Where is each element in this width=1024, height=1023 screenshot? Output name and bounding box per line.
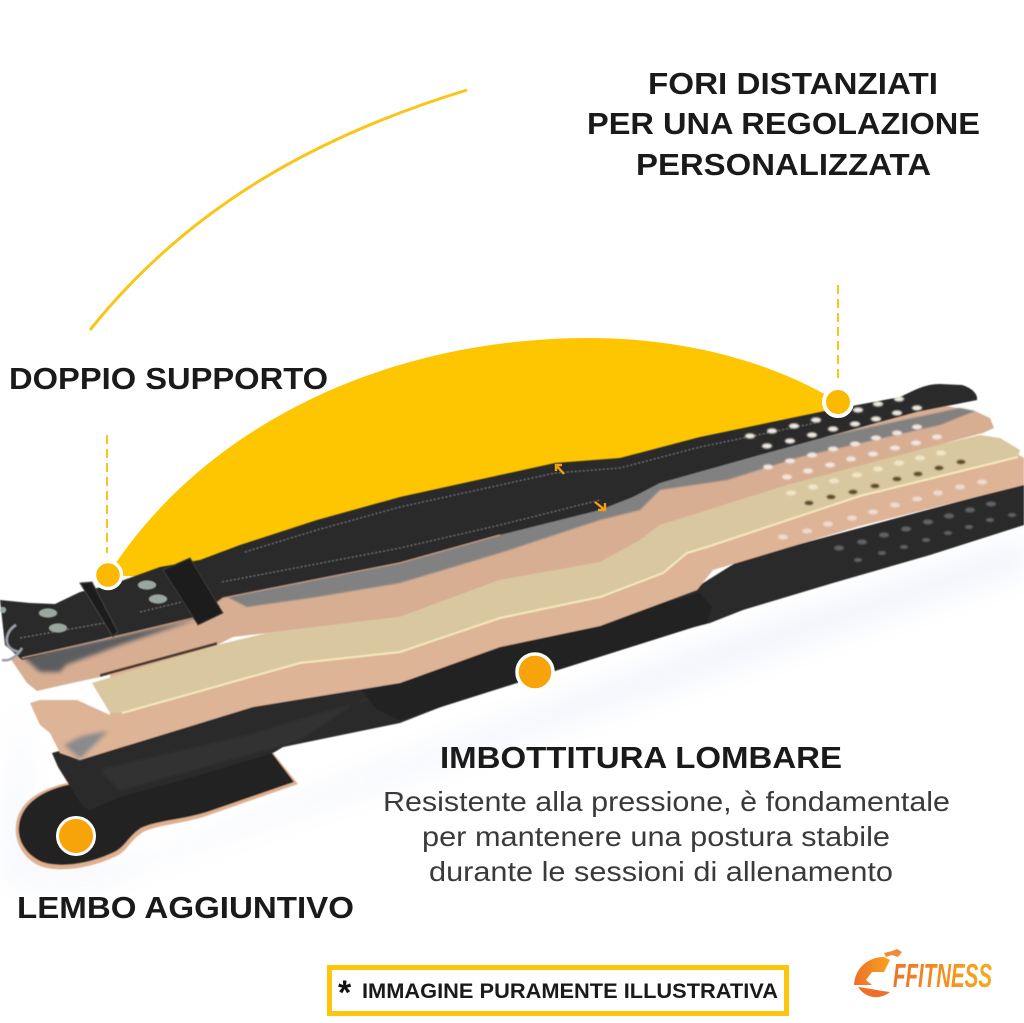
body text: per mantenere una postura stabile [422, 821, 890, 852]
holes on top layer [745, 396, 922, 448]
marker: lembo [58, 818, 94, 854]
grey shadow on strap end [22, 618, 200, 672]
holes on beige layer [786, 450, 946, 496]
logo [854, 949, 992, 997]
rivets [0, 580, 167, 632]
small arrows [556, 465, 605, 510]
belt loops [80, 582, 118, 637]
heading: fori distanziati: PER UNA REGOLAZIONE [587, 106, 980, 141]
lumbar pad [360, 593, 712, 720]
dark flap edge [100, 642, 217, 677]
marker: imbottitura [517, 654, 553, 690]
belt illustration [0, 384, 1024, 880]
heading: fori distanziati [587, 66, 980, 182]
heading: fori distanziati: FORI DISTANZIATI [648, 66, 938, 101]
body text: Resistente alla pressione, è fondamentale [383, 786, 950, 817]
body text: durante le sessioni di allenamento [429, 856, 893, 887]
holes on upper tan layer [763, 424, 942, 480]
tan edge line [22, 535, 500, 658]
holes on black layer [834, 502, 1016, 562]
holes on lower tan layer [778, 480, 987, 540]
heading: lembo aggiuntivo: LEMBO AGGIUNTIVO [17, 890, 354, 925]
body text [383, 786, 950, 887]
yellow semicircle background [108, 338, 838, 580]
grey shadow on tan layer [223, 408, 975, 607]
disclaimer box [330, 968, 786, 1014]
top black layer [0, 384, 977, 660]
soft shadow [10, 540, 1024, 880]
dashed leader lines [107, 285, 838, 553]
marker: doppio supporto [94, 562, 122, 588]
disclaimer box: IMMAGINE PURAMENTE ILLUSTRATIVA [362, 980, 778, 1003]
black padded layer [52, 484, 1024, 810]
upper tan layer [10, 405, 994, 691]
marker: fori [824, 388, 852, 416]
heading: fori distanziati: PERSONALIZZATA [636, 147, 931, 182]
buckle [2, 625, 22, 660]
lower tan layer [30, 450, 1024, 760]
grey fold on lower tan layer [64, 731, 108, 759]
heading: doppio supporto: DOPPIO SUPPORTO [9, 361, 328, 396]
yellow arc line [90, 90, 467, 330]
disclaimer box: * [338, 974, 352, 1012]
stitching [20, 422, 820, 638]
beige layer [92, 435, 1020, 713]
flap layer [16, 753, 298, 869]
heading: imbottitura lombare: IMBOTTITURA LOMBARE [440, 740, 842, 775]
